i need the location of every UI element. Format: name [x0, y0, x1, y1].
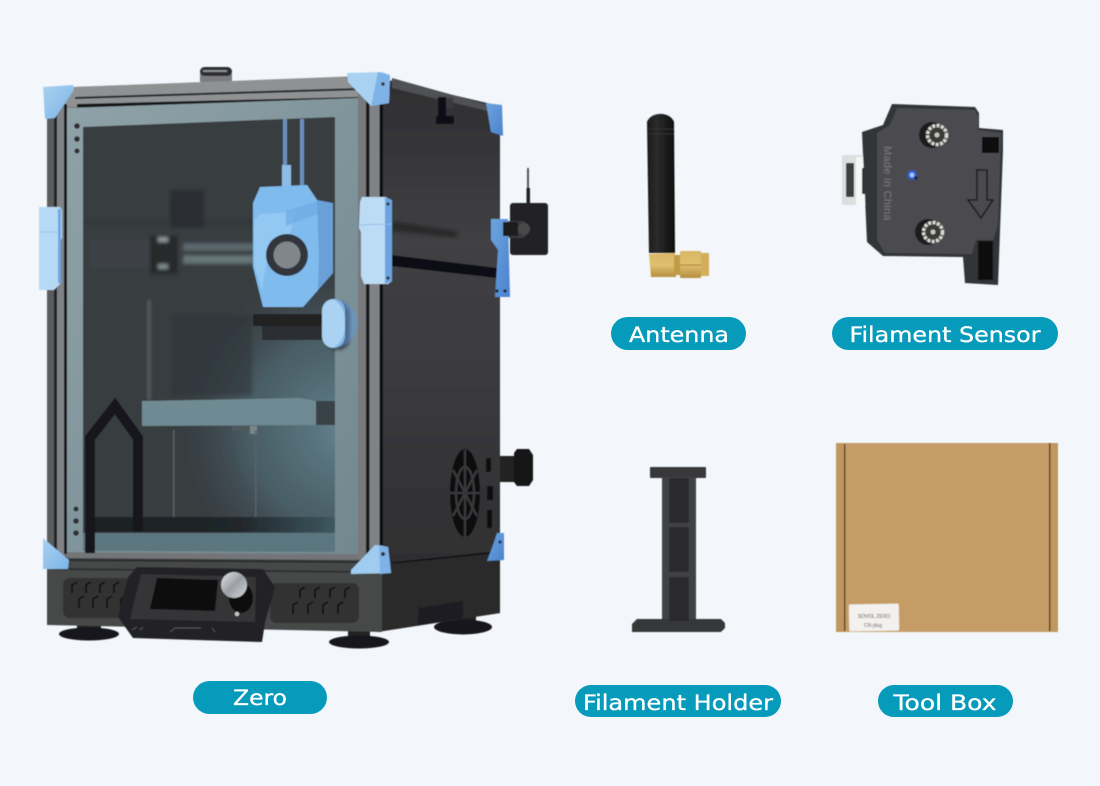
label: Zero — [193, 681, 327, 714]
print head tubes — [282, 119, 304, 187]
label: Filament Holder — [575, 685, 781, 717]
label: Filament Holder: Filament Holder — [583, 691, 773, 715]
front frame — [47, 76, 382, 560]
LED — [907, 170, 918, 180]
dial — [221, 572, 253, 616]
hex grille right — [270, 583, 359, 623]
label: Filament Sensor — [832, 317, 1058, 350]
rear latch — [436, 97, 454, 124]
side base — [377, 550, 500, 632]
spool holder on side — [500, 449, 533, 486]
accessory: tool box — [836, 443, 1058, 632]
embossed text: Made in China — [881, 146, 893, 221]
door handle — [322, 299, 358, 350]
screw bottom — [915, 219, 942, 245]
corner: bottom back — [487, 533, 504, 561]
clip: centre — [359, 197, 392, 284]
label: Zero: Zero — [233, 686, 287, 710]
holder windows — [669, 478, 689, 621]
label: Tool Box: Tool Box — [892, 691, 996, 715]
print head, blue — [253, 185, 333, 307]
blue corner brackets and clips — [39, 72, 518, 574]
corner: bottom left — [43, 538, 69, 569]
print bed — [142, 314, 335, 518]
label: Antenna — [611, 317, 746, 350]
bracket: antenna mount — [491, 219, 518, 297]
corner: top left — [43, 85, 74, 119]
hex grille left — [63, 578, 133, 618]
corner: top centre — [347, 72, 390, 106]
screw top — [919, 122, 946, 148]
right side panel — [377, 78, 500, 632]
front base with control panel — [47, 553, 382, 642]
side stripes — [391, 221, 497, 278]
antenna module on side — [505, 168, 548, 255]
accessory: antenna — [647, 114, 709, 278]
top knob — [200, 67, 232, 82]
printer feet — [59, 612, 492, 648]
screen — [150, 578, 218, 611]
label: Antenna: Antenna — [629, 323, 729, 347]
filament guide outline — [90, 406, 138, 557]
printer interior seen through glass — [85, 119, 335, 557]
control panel bezel — [118, 567, 275, 642]
gold SMA connector — [649, 251, 709, 278]
white connector — [842, 155, 874, 205]
glass door — [67, 98, 358, 554]
accessory: filament sensor — [842, 104, 1003, 285]
door hinges and screws — [73, 123, 80, 536]
arrow mark — [968, 170, 993, 218]
dark band at bottom of chamber — [93, 517, 335, 532]
box label — [849, 604, 899, 631]
box label: CN plug — [864, 623, 882, 629]
label: Tool Box — [878, 685, 1013, 717]
box label: SOVOL ZERO — [858, 614, 890, 620]
slots — [982, 137, 999, 153]
label: Filament Sensor: Filament Sensor — [850, 323, 1041, 347]
side fan vent — [450, 449, 493, 537]
accessory: filament holder — [632, 467, 725, 632]
sensor body — [862, 104, 1003, 285]
main product: Zero 3D printer — [39, 67, 548, 648]
corner: bottom centre — [351, 545, 391, 574]
corner: top back — [486, 103, 503, 136]
clip: left — [39, 207, 62, 290]
